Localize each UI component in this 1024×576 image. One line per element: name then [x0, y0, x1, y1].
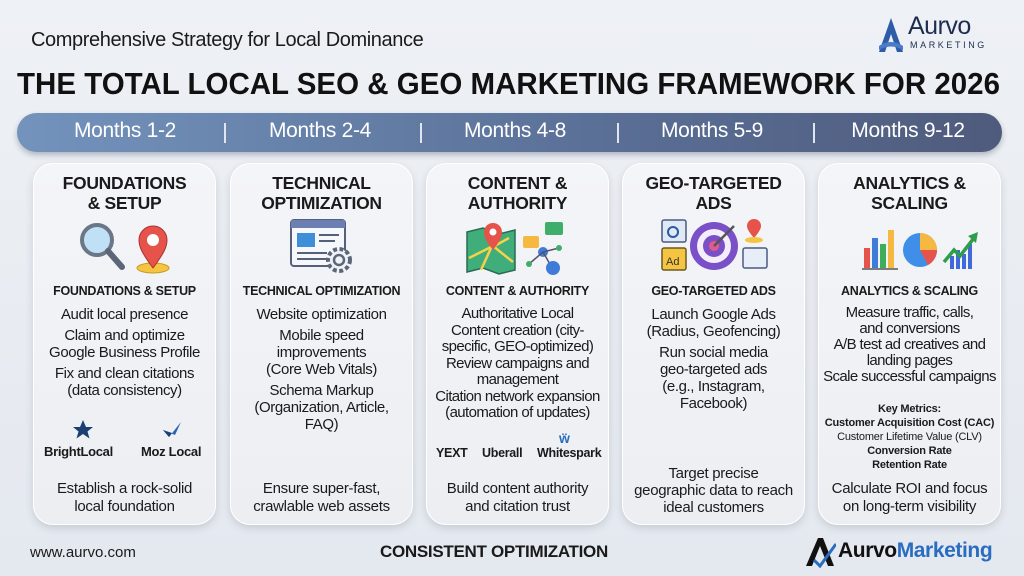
panel: content	[426, 163, 609, 525]
text: tasks: Content creation (city-	[451, 322, 584, 338]
text: tasks: Google Business Profile	[49, 344, 200, 361]
logo: top right: Aurvo	[908, 12, 971, 40]
heading: ANALYTICS &	[853, 173, 966, 193]
heading: OPTIMIZATION	[261, 193, 382, 213]
panel: analytics	[818, 163, 1001, 525]
text: tasks: A/B test ad creatives and	[834, 336, 985, 353]
text: tasks	[435, 305, 600, 421]
text: tasks: Measure traffic, calls,	[846, 304, 973, 321]
text: tasks: Review campaigns and	[446, 354, 589, 372]
footer text	[253, 480, 390, 515]
text: tasks: (Organization, Article,	[254, 399, 389, 416]
heading: AUTHORITY	[468, 193, 567, 213]
logo: bottom right	[806, 538, 992, 568]
footer text: on long-term visibility	[843, 498, 976, 515]
text: tasks: Claim and optimize	[64, 327, 185, 344]
subheading: TECHNICAL OPTIMIZATION	[243, 284, 400, 298]
heading	[645, 173, 782, 213]
heading: & SETUP	[88, 193, 161, 213]
tool logos: Moz Local	[141, 444, 201, 459]
key metrics: Key Metrics:	[878, 403, 941, 415]
heading	[853, 173, 966, 213]
footer text	[447, 480, 588, 515]
footer text	[634, 465, 793, 516]
text: tasks: Mobile speed	[279, 327, 364, 344]
key metrics: Conversion Rate	[867, 445, 952, 457]
logo: top right	[879, 12, 987, 52]
heading	[63, 173, 186, 213]
text: tasks: and conversions	[859, 320, 960, 337]
text: tasks: landing pages	[867, 352, 952, 369]
tool logos: Whitespark	[537, 446, 601, 460]
text: tasks: Launch Google Ads	[651, 306, 776, 323]
text: tasks: (Radius, Geofencing)	[647, 323, 780, 340]
footer text: Target precise	[668, 465, 758, 482]
text: tasks: Facebook)	[680, 395, 747, 412]
tool logos: BrightLocal	[44, 444, 113, 459]
timeline bar: Months 1-2	[74, 119, 176, 142]
tool logos: ẅ	[559, 430, 570, 446]
panel: geo ads	[622, 163, 805, 525]
footer text: Establish a rock-solid	[57, 480, 192, 497]
text: tasks: specific, GEO-optimized)	[442, 338, 593, 355]
icon: magnifier and pin	[80, 223, 170, 274]
heading: FOUNDATIONS	[63, 173, 186, 193]
text: tasks: Run social media	[659, 344, 768, 361]
heading: GEO-TARGETED	[645, 173, 782, 193]
text: tasks: Website optimization	[256, 306, 387, 323]
icon: ads target pin	[661, 219, 768, 271]
footer text	[57, 480, 192, 515]
text: tasks: (e.g., Instagram,	[662, 378, 765, 395]
footer text: Ensure super-fast,	[263, 480, 380, 497]
key metrics: Retention Rate	[872, 459, 947, 471]
footer text: geographic data to reach	[634, 482, 793, 499]
text: tasks: management	[477, 371, 558, 388]
text: tasks: geo-targeted ads	[660, 361, 767, 378]
footer tagline: CONSISTENT OPTIMIZATION	[380, 542, 608, 561]
icon: browser and gear	[290, 219, 352, 273]
tool logos: YEXT	[436, 446, 467, 460]
key metrics	[825, 403, 994, 471]
text: tasks: (Core Web Vitals)	[266, 361, 377, 378]
tool logos	[44, 420, 201, 459]
footer text: ideal customers	[663, 499, 764, 516]
text: tasks: FAQ)	[305, 416, 338, 433]
text: tasks: Authoritative Local	[461, 305, 574, 322]
timeline bar: Months 2-4	[269, 119, 371, 142]
footer text: Calculate ROI and focus	[832, 480, 987, 497]
subheading: GEO-TARGETED ADS	[651, 284, 776, 298]
tool logos: Uberall	[482, 446, 522, 460]
timeline bar: Months 5-9	[661, 119, 763, 142]
subheading: CONTENT & AUTHORITY	[446, 284, 589, 298]
text: tasks: Schema Markup	[269, 382, 374, 399]
text: tasks: Fix and clean citations	[55, 365, 194, 382]
heading	[468, 173, 568, 213]
panel: technical	[230, 163, 413, 525]
heading	[261, 173, 382, 213]
text: tasks	[647, 306, 780, 412]
text: tasks: Audit local presence	[61, 306, 188, 323]
subheading: ANALYTICS & SCALING	[841, 284, 978, 298]
text: tasks	[49, 306, 200, 399]
footer text: Build content authority	[447, 480, 588, 497]
text: tasks: Citation network expansion	[435, 388, 600, 404]
key metrics: Customer Acquisition Cost (CAC)	[825, 417, 994, 429]
text: tasks: (data consistency)	[67, 382, 182, 399]
timeline bar	[17, 113, 1002, 152]
text: tasks: Scale successful campaigns	[823, 368, 996, 385]
footer url: www.aurvo.com	[30, 544, 136, 561]
key metrics: Customer Lifetime Value (CLV)	[837, 431, 982, 443]
heading: ADS	[695, 193, 732, 213]
heading: SCALING	[871, 193, 948, 213]
icon: ads target pin: Ad	[666, 256, 679, 268]
text: tasks	[254, 306, 389, 433]
timeline bar: Months 4-8	[464, 119, 566, 142]
footer text	[832, 480, 988, 515]
subtitle: Comprehensive Strategy for Local Dominance	[31, 29, 423, 51]
tool logos	[436, 430, 602, 460]
footer text: and citation trust	[465, 498, 570, 515]
text: tasks	[823, 304, 996, 385]
icon: map and network	[466, 222, 563, 275]
footer text: crawlable web assets	[253, 498, 390, 515]
timeline bar: Months 9-12	[851, 119, 965, 142]
logo: top right: MARKETING	[910, 40, 987, 50]
logo: bottom right: AurvoMarketing	[838, 539, 992, 562]
text: tasks: (automation of updates)	[445, 404, 590, 421]
footer text: local foundation	[74, 498, 175, 515]
heading: CONTENT &	[468, 173, 567, 193]
panel: foundations	[33, 163, 216, 525]
text: tasks: improvements	[277, 344, 366, 361]
subheading: FOUNDATIONS & SETUP	[53, 284, 196, 298]
icon: charts	[862, 230, 978, 270]
heading: TECHNICAL	[272, 173, 371, 193]
